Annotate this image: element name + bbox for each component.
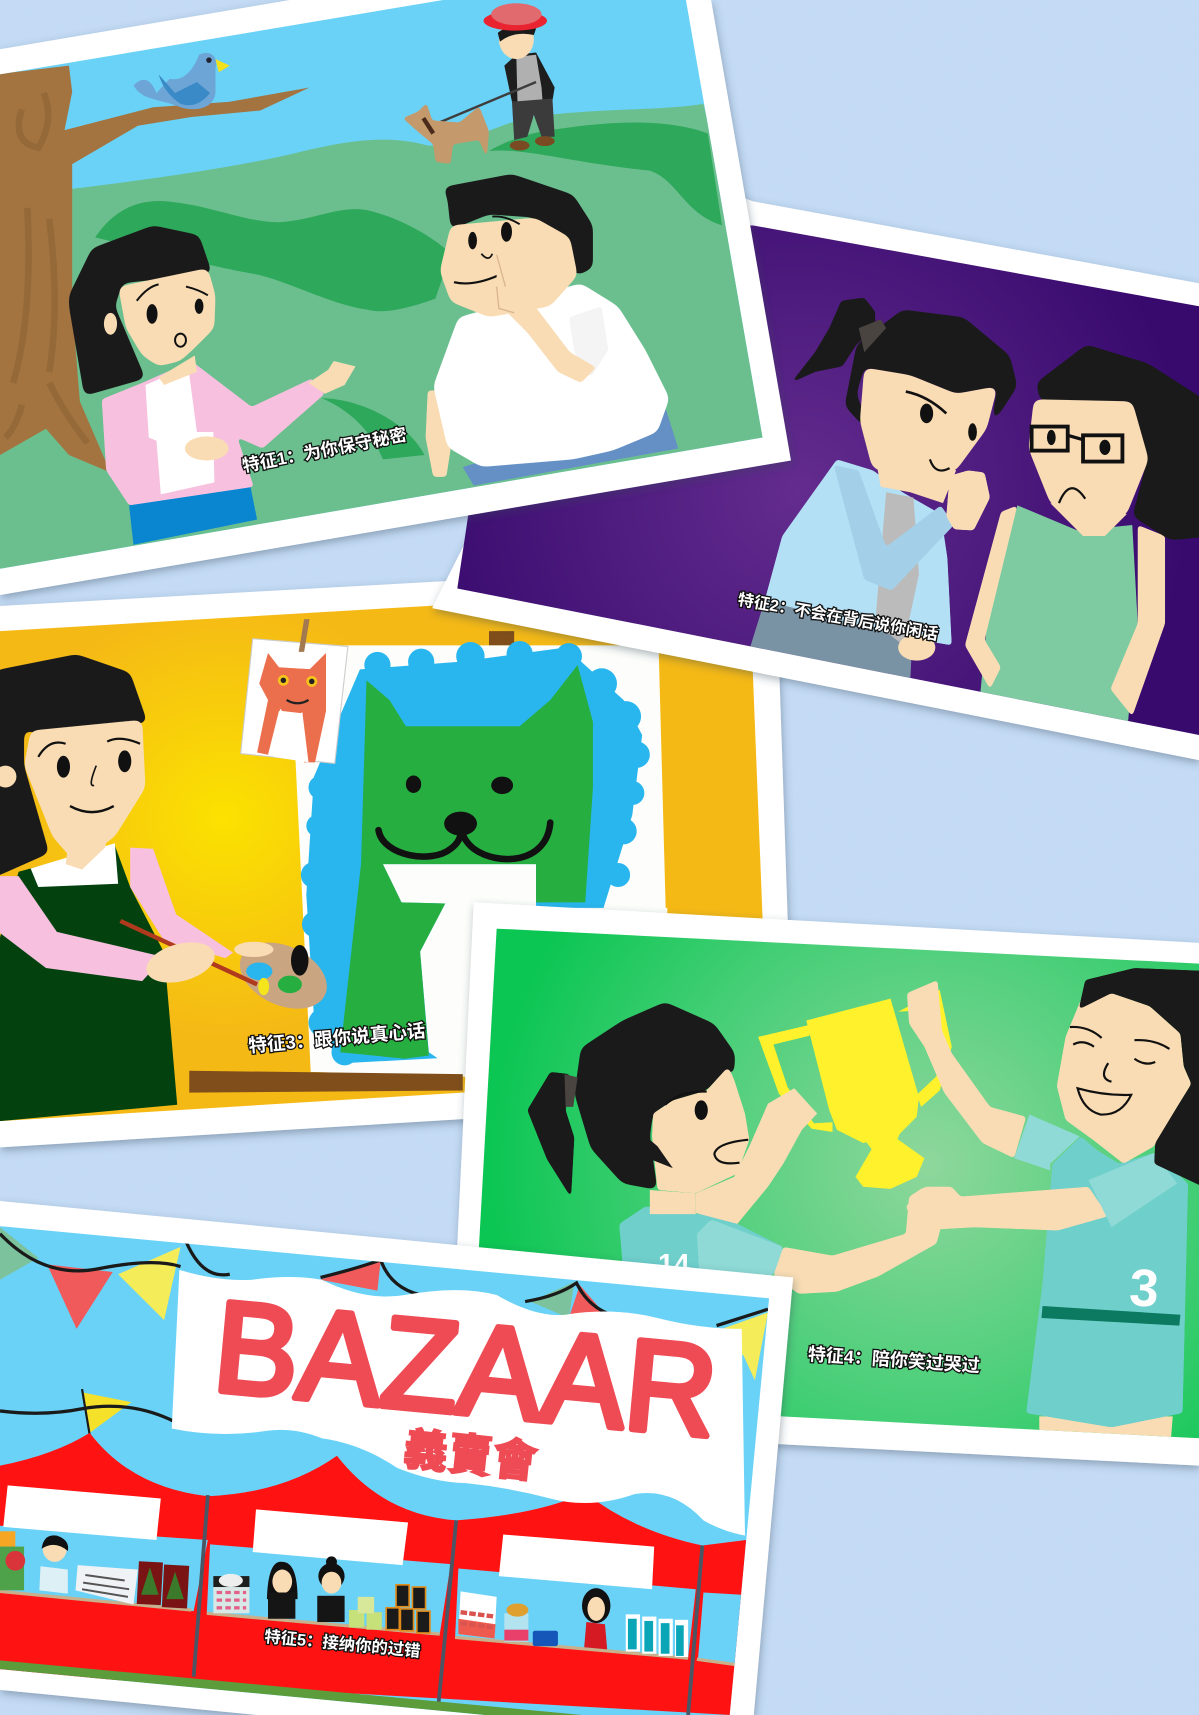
- caption 2: 特征2：不会在背后说你闲话: [736, 590, 940, 644]
- ponytail girl: [527, 1002, 783, 1281]
- whispering girl: [749, 298, 1017, 682]
- photo 2: no gossip behind your back: [432, 164, 1199, 766]
- caption 1: 特征1：为你保守秘密: [241, 424, 409, 476]
- laughing woman: [906, 968, 1199, 1444]
- trophy: [758, 990, 952, 1189]
- pinned cat print: [241, 619, 348, 763]
- easel shelf: [189, 1071, 463, 1093]
- caption 4: 特征4：陪你笑过哭过: [807, 1344, 981, 1376]
- man finger on nose: [426, 174, 678, 486]
- bazaar banner: [172, 1270, 745, 1536]
- photo 1: keeps your secrets: [0, 0, 791, 595]
- booth 3 goods and seller: [458, 1588, 688, 1657]
- green cat painting: [340, 665, 593, 1059]
- painter girl: [0, 654, 337, 1127]
- banner subtitle: 義賣會: [401, 1423, 540, 1488]
- worried girl with glasses: [965, 345, 1199, 723]
- woman talking: [69, 225, 356, 545]
- banner title: BAZAAR: [209, 1274, 723, 1464]
- jersey number: 3: [1128, 1258, 1160, 1319]
- caption 3: 特征3：跟你说真心话: [247, 1020, 426, 1056]
- man walking dog: [403, 3, 555, 164]
- booth 1 goods and seller: [0, 1531, 189, 1608]
- painted blue background: [301, 641, 650, 1065]
- booth 2 goods and sellers: [213, 1556, 430, 1633]
- caption 5: 特征5：接纳你的过错: [264, 1627, 421, 1661]
- photo 5: bazaar: [0, 1201, 793, 1715]
- shirt number: 14: [658, 1249, 690, 1281]
- red tents: [0, 1433, 746, 1715]
- palette: [240, 942, 327, 1009]
- photo 4: laughs and cries with you: [449, 902, 1199, 1466]
- bird: [133, 53, 230, 109]
- arms: [696, 980, 1026, 1294]
- green hills: [0, 104, 788, 580]
- bunting flags: [0, 1227, 768, 1435]
- tree: [0, 66, 310, 472]
- photo 3: telling the truth, painting: [0, 563, 788, 1147]
